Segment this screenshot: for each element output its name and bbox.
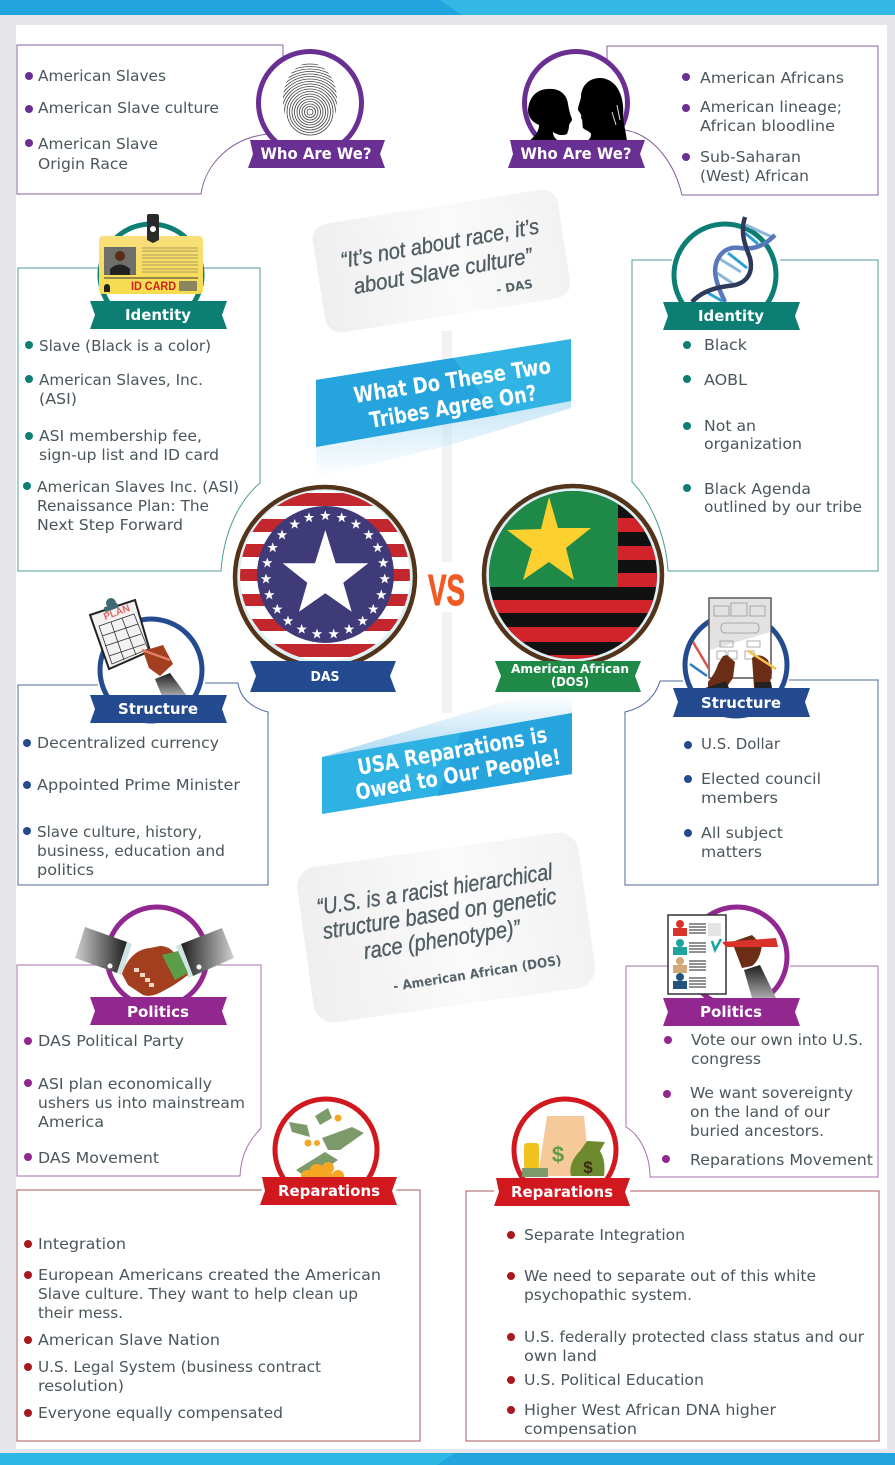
- heading: politics: [663, 998, 800, 1026]
- heading: identity: Identity: [125, 306, 191, 324]
- icon: money bags: $: [552, 1142, 564, 1167]
- ribbon: American African DOS: American African: [511, 661, 629, 676]
- list: identity left: American Slaves Inc. (ASI): [37, 478, 239, 496]
- list: who are we left: American Slave: [38, 135, 158, 153]
- heading: politics: [90, 997, 227, 1025]
- panel: reparations right: [466, 1099, 879, 1441]
- banner: USA reparations: Owed to Our People!: [354, 745, 563, 806]
- list: reparations left: Everyone equally compensated: [38, 1404, 283, 1422]
- heading: politics: Politics: [127, 1003, 189, 1021]
- list: politics left: DAS Political Party: [38, 1032, 184, 1050]
- ribbon: American African DOS: (DOS): [551, 674, 589, 689]
- icon: handshake: [75, 907, 234, 1007]
- panel: politics right: [626, 907, 878, 1177]
- panel: who are we right: [508, 46, 878, 195]
- icon: flow chart document: [685, 598, 787, 716]
- list: reparations left: Integration: [38, 1235, 126, 1253]
- ribbon: DAS: [250, 661, 396, 692]
- list: who are we left: [25, 67, 219, 173]
- list: identity left: sign-up list and ID card: [39, 446, 219, 464]
- quote: slave culture: - DAS: [495, 277, 534, 297]
- list: identity left: American Slaves, Inc.: [39, 371, 203, 389]
- heading: structure: Structure: [701, 694, 781, 712]
- list: reparations left: [24, 1235, 381, 1422]
- list: structure left: Decentralized currency: [37, 734, 219, 752]
- list: who are we right: American lineage;: [700, 98, 842, 116]
- list: reparations left: resolution): [38, 1377, 124, 1395]
- list: identity right: Not an: [704, 417, 756, 435]
- list: reparations left: U.S. Legal System (business contract: [38, 1358, 321, 1376]
- list: reparations right: U.S. federally protected class status and our: [524, 1328, 865, 1346]
- heading: politics: Politics: [700, 1003, 762, 1021]
- list: identity left: ASI membership fee,: [39, 427, 202, 445]
- icon: two silhouettes: [524, 52, 628, 154]
- list: reparations right: Separate Integration: [524, 1226, 685, 1244]
- panel: identity left: [18, 214, 260, 571]
- icon: fingerprint: [256, 49, 364, 140]
- list: who are we right: Sub-Saharan: [700, 148, 801, 166]
- quote: racist hierarchical structure: [295, 830, 598, 1025]
- list: reparations right: [507, 1226, 865, 1438]
- banner: USA reparations: USA Reparations is: [356, 723, 549, 781]
- heading: identity: Identity: [698, 307, 764, 325]
- list: reparations right: Higher West African DNA higher: [524, 1401, 777, 1419]
- list: identity left: Next Step Forward: [37, 516, 183, 534]
- list: structure left: Appointed Prime Minister: [37, 776, 241, 794]
- heading: identity: [663, 302, 800, 330]
- list: structure right: [684, 735, 821, 861]
- list: structure left: Slave culture, history,: [37, 823, 202, 841]
- quote: racist hierarchical structure: - American African (DOS): [392, 954, 563, 995]
- list: politics left: DAS Movement: [38, 1149, 159, 1167]
- list: identity right: [683, 336, 862, 516]
- list: reparations left: European Americans created the American: [38, 1266, 381, 1284]
- list: structure right: matters: [701, 843, 762, 861]
- list: reparations left: American Slave Nation: [38, 1331, 220, 1349]
- quote: slave culture: “It’s not about race, it’s: [339, 213, 541, 273]
- heading: who are we: [248, 140, 385, 168]
- icon: plan clipboard: PLAN: [102, 603, 132, 623]
- emblem: DAS: [230, 487, 420, 692]
- list: structure right: All subject: [701, 824, 783, 842]
- heading: structure: [673, 688, 810, 717]
- panel: who are we left: [17, 45, 385, 194]
- list: who are we right: (West) African: [700, 167, 809, 185]
- list: politics right: Vote our own into U.S.: [691, 1031, 863, 1049]
- list: reparations right: own land: [524, 1347, 597, 1365]
- list: who are we left: Origin Race: [38, 155, 128, 173]
- heading: who are we: Who Are We?: [260, 144, 372, 163]
- panel: structure left: [18, 598, 268, 885]
- list: identity right: organization: [704, 435, 802, 453]
- banner: what do these two tribes agree on: Tribes Agree On?: [368, 381, 539, 434]
- heading: who are we: Who Are We?: [520, 144, 632, 163]
- emblem: American African DOS: [484, 485, 668, 692]
- list: reparations right: psychopathic system.: [524, 1286, 692, 1304]
- list: structure left: [23, 734, 241, 879]
- list: identity left: Renaissance Plan: The: [37, 497, 209, 515]
- list: politics left: America: [38, 1113, 104, 1131]
- heading: identity: [90, 301, 227, 329]
- list: structure right: U.S. Dollar: [701, 735, 781, 753]
- quote: slave culture: [310, 187, 573, 335]
- list: who are we right: African bloodline: [700, 117, 835, 135]
- list: who are we right: [682, 69, 844, 185]
- icon: falling money and coins: [275, 1099, 377, 1201]
- list: politics right: buried ancestors.: [690, 1122, 824, 1140]
- list: identity left: (ASI): [39, 390, 77, 408]
- panel: structure right: [625, 598, 878, 885]
- heading: structure: [90, 695, 227, 723]
- list: identity left: Slave (Black is a color): [39, 337, 211, 355]
- list: reparations left: their mess.: [38, 1304, 123, 1322]
- heading: reparations: Reparations: [511, 1183, 613, 1201]
- list: structure right: Elected council: [701, 770, 821, 788]
- panel: identity right: [632, 217, 878, 571]
- bottom colour bar: [0, 1453, 895, 1465]
- quote: racist hierarchical structure: race (phenotype)”: [362, 914, 523, 964]
- list: structure left: business, education and: [37, 842, 225, 860]
- list: politics right: We want sovereignty: [690, 1084, 853, 1102]
- heading: reparations: [260, 1177, 397, 1205]
- list: identity right: Black: [704, 336, 747, 354]
- banner: USA reparations: [322, 695, 572, 814]
- list: politics right: congress: [691, 1050, 761, 1068]
- list: reparations right: U.S. Political Education: [524, 1371, 704, 1389]
- icon: ID card: [99, 214, 203, 326]
- list: identity left: [23, 337, 239, 534]
- ribbon: American African DOS: [495, 661, 641, 692]
- panel: politics left: [17, 907, 261, 1176]
- ribbon: DAS: DAS: [310, 670, 340, 685]
- top colour bar: [0, 0, 895, 15]
- panel: reparations left: [17, 1099, 420, 1441]
- heading: reparations: Reparations: [278, 1182, 380, 1200]
- quote: slave culture: about Slave culture”: [352, 243, 536, 299]
- quote: racist hierarchical structure: structure based on genetic: [321, 882, 558, 944]
- icon: money bags: $: [583, 1158, 593, 1177]
- icon: plan clipboard: [90, 598, 202, 721]
- banner: what do these two tribes agree on: [316, 339, 571, 478]
- heading: structure: Structure: [118, 700, 198, 718]
- list: politics right: on the land of our: [690, 1103, 831, 1121]
- heading: reparations: [494, 1178, 630, 1206]
- icon: money bags: [514, 1099, 616, 1201]
- heading: who are we: [508, 140, 645, 168]
- icon: ID card: ID CARD: [131, 279, 176, 293]
- icon: DNA helix: [674, 217, 776, 326]
- list: reparations left: Slave culture. They want to help clean up: [38, 1285, 358, 1303]
- list: politics left: [24, 1032, 245, 1167]
- label: VS: VS: [428, 566, 465, 615]
- list: politics right: Reparations Movement: [690, 1151, 873, 1169]
- list: who are we left: American Slaves: [38, 67, 166, 85]
- list: reparations right: We need to separate out of this white: [524, 1267, 816, 1285]
- list: politics left: ASI plan economically: [38, 1075, 212, 1093]
- list: identity right: Black Agenda: [704, 480, 811, 498]
- list: identity right: outlined by our tribe: [704, 498, 862, 516]
- quote: racist hierarchical structure: “U.S. is a racist hierarchical: [315, 858, 555, 920]
- centre vertical spine: [442, 331, 452, 713]
- list: who are we right: American Africans: [700, 69, 844, 87]
- banner: what do these two tribes agree on: What Do These Two: [352, 354, 553, 409]
- list: structure right: members: [701, 789, 778, 807]
- list: politics left: ushers us into mainstream: [38, 1094, 245, 1112]
- list: politics right: [662, 1031, 873, 1169]
- list: who are we left: American Slave culture: [38, 99, 219, 117]
- list: structure left: politics: [37, 861, 94, 879]
- list: reparations right: compensation: [524, 1420, 637, 1438]
- list: identity right: AOBL: [704, 371, 748, 389]
- icon: ballot sheet and hand: [668, 907, 787, 1007]
